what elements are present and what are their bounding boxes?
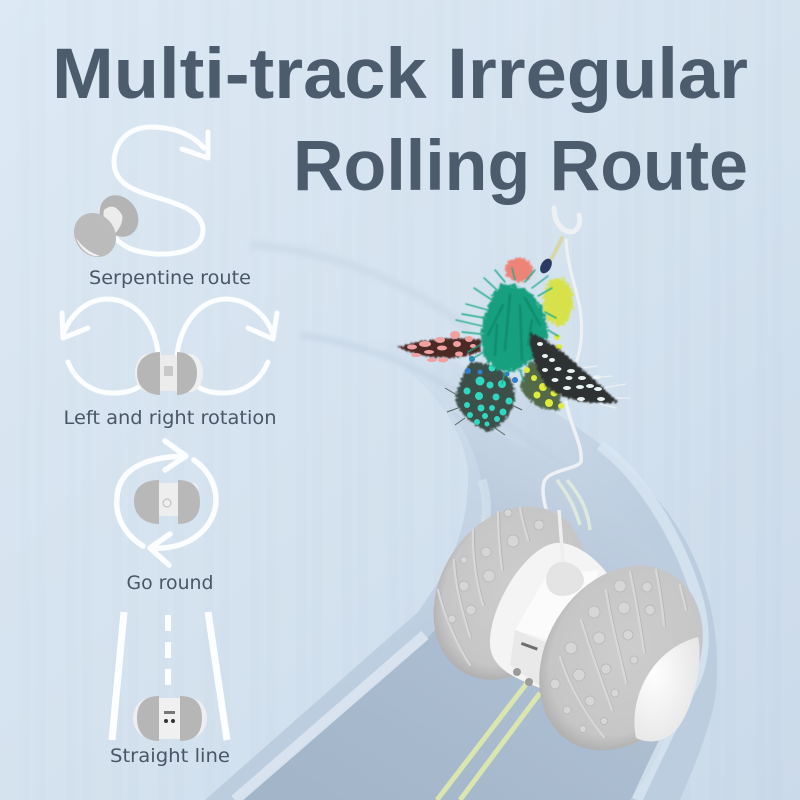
center dashed line bbox=[165, 615, 171, 690]
title: Multi-track Irregular bbox=[52, 35, 748, 114]
go round diagram bbox=[117, 441, 216, 594]
lower circular arrow bbox=[150, 460, 216, 565]
right arc arrow bbox=[177, 299, 277, 393]
green fluffy feather bbox=[456, 268, 558, 384]
navy bead bbox=[538, 257, 554, 275]
white end cap bbox=[634, 637, 700, 742]
teal dotted feather bbox=[445, 356, 522, 435]
upper circular arrow bbox=[117, 441, 186, 546]
wire and hanger bbox=[543, 208, 582, 550]
yellow dots bbox=[524, 334, 564, 409]
title bbox=[52, 35, 748, 206]
white body bbox=[490, 543, 610, 690]
right lane line bbox=[208, 612, 227, 740]
feather toy bbox=[398, 208, 630, 550]
serpentine route diagram bbox=[65, 127, 251, 289]
small robot, rotation bbox=[135, 352, 203, 395]
label: serpentine route: Serpentine route bbox=[89, 267, 251, 289]
pink dotted feather bbox=[398, 331, 482, 362]
title: Rolling Route bbox=[293, 127, 748, 206]
curved road bbox=[205, 245, 717, 800]
small robot, straight bbox=[133, 696, 207, 741]
white dotted feather bbox=[530, 333, 630, 408]
serpentine arrow bbox=[114, 127, 208, 254]
robot toy bbox=[403, 478, 736, 781]
straight line diagram bbox=[110, 612, 230, 767]
right wheel bbox=[506, 535, 736, 781]
yellow feathers bbox=[543, 278, 573, 326]
label: left and right rotation: Left and right rotation bbox=[64, 407, 276, 429]
left lane line bbox=[112, 612, 124, 740]
label: straight line: Straight line bbox=[110, 745, 230, 767]
left wheel bbox=[403, 478, 617, 708]
small robot, serpentine bbox=[65, 188, 146, 265]
rotation diagram bbox=[62, 299, 277, 429]
wire base bbox=[546, 510, 584, 596]
label: go round: Go round bbox=[126, 572, 214, 594]
coral feather bbox=[505, 258, 533, 282]
left arc arrow bbox=[62, 299, 158, 393]
small robot, go round bbox=[134, 480, 200, 524]
